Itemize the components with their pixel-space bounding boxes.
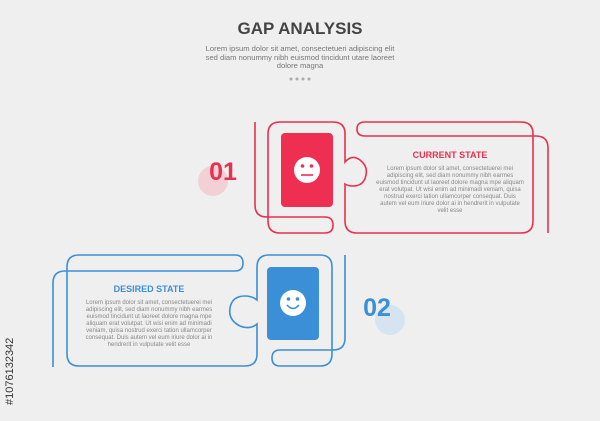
- subtitle: Lorem ipsum dolor sit amet, consectetueri adipiscing elit sed diam nonummy nibh euismod tincidunt utare laoreet dolore magna: [206, 44, 394, 70]
- text: current state: CURRENT STATE: [413, 150, 487, 160]
- number 02: 02: [363, 294, 391, 322]
- watermark id: #1076132342: [4, 338, 16, 405]
- text: desired state: DESIRED STATE: [114, 284, 184, 294]
- panel 2 outline: [53, 255, 345, 367]
- number 01: 01: [209, 158, 237, 186]
- text: current state: Lorem ipsum dolor sit amet, consectetuerei mei adipiscing elit, sed diam nonummy nibh earmes euismod tincidunt ut laoreet dolore magna mpe aliquam erat volutpat. Ut wisi enim ad minimadi veniam, quisa nostrud exerci tation ullamcorper consequat. Duis autem vel eum iriure dolor ai in hendrerit in vulputate velit esse: [376, 166, 524, 214]
- title: GAP ANALYSIS: [237, 19, 363, 38]
- panel 1 outline: [255, 122, 548, 233]
- text: desired state: Lorem ipsum dolor sit amet, consectetuerei mei adipiscing elit, sed diam nonummy nibh earmes euismod tincidunt ut laoreet dolore magna mpe aliquam erat volutpat. Ut wisi enim ad minimadi veniam, quisa nostrud exerci tation ullamcorper consequat. Duis autem vel eum iriure dolor ai in hendrerit in vulputate velit esse: [86, 300, 212, 348]
- icon: blue card smile: [267, 267, 319, 340]
- dots: [290, 78, 310, 80]
- circles: [198, 166, 228, 196]
- icon: red card neutral face: [281, 133, 333, 207]
